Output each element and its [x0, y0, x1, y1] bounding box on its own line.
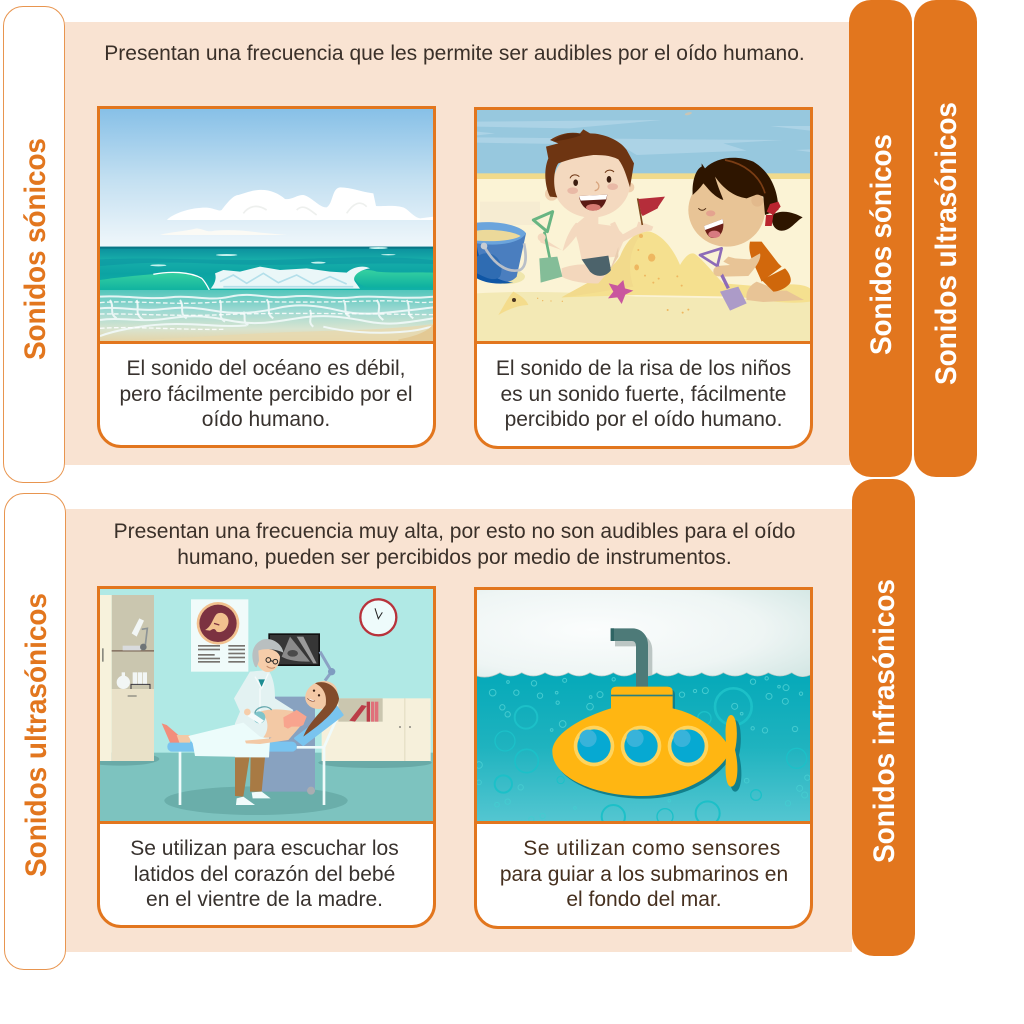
patient and doctor group: [162, 639, 348, 815]
boy head: [545, 187, 558, 201]
table: [180, 720, 336, 805]
right tab: Sonidos ultrasónicos: [914, 0, 977, 477]
right tab: Sonidos sónicos: [849, 0, 912, 477]
illustration: yellow submarine: [477, 590, 810, 821]
periscope: [611, 628, 648, 688]
sand mound: [562, 231, 810, 303]
panel: sonidos ultrasónicos background: [66, 509, 852, 952]
caption: children: percibido por el oído humano.: [505, 408, 782, 431]
flag: [638, 198, 642, 225]
heading: ultrasonic sounds description: Presentan una frecuencia muy alta, por esto no son audibles para el oído: [114, 520, 795, 543]
poster: [191, 599, 248, 672]
machine: [262, 697, 315, 792]
probe: [253, 711, 265, 723]
shell: [498, 292, 528, 315]
girl body: [746, 282, 804, 302]
bucket: [488, 269, 525, 284]
caption: ocean: oído humano.: [202, 408, 330, 431]
left tab: Sonidos sónicos: [3, 6, 65, 483]
left tab: Sonidos ultrasónicos: Sonidos ultrasónicos: [20, 593, 53, 877]
card: ocean: [97, 106, 436, 448]
caption: ocean: El sonido del océano es débil,: [126, 357, 406, 380]
portholes: [574, 726, 708, 766]
girl head: [688, 173, 765, 247]
heading: sonic sounds description: Presentan una frecuencia que les permite ser audibles por el oído humano.: [104, 42, 805, 65]
caption: ultrasound: [130, 837, 399, 911]
card: children laughing: [474, 107, 813, 449]
illustration: children playing on beach: [477, 110, 810, 341]
heading: ultrasonic sounds description: humano, pueden ser percibidos por medio de instrumentos.: [177, 546, 732, 569]
illustration: ocean wave and beach: [100, 109, 433, 341]
caption: children: El sonido de la risa de los niños: [496, 357, 791, 380]
caption: ocean: [120, 357, 412, 431]
starfish: [608, 280, 633, 304]
divider: [477, 821, 810, 824]
card: ultrasound: [97, 586, 436, 928]
caption: ultrasound: en el vientre de la madre.: [146, 888, 383, 911]
illustration: ultrasound in clinic: [100, 589, 433, 821]
torso and belly: [260, 709, 300, 738]
divider: [477, 341, 810, 344]
bubbles: [495, 688, 807, 828]
caption: children: [496, 357, 791, 431]
caption: submarine: el fondo del mar.: [566, 888, 722, 911]
monitor: [268, 633, 320, 666]
divider: [100, 341, 433, 344]
boy body: [562, 264, 610, 283]
panel: sonidos sónicos background: [65, 22, 850, 465]
caption: submarine: para guiar a los submarinos en: [500, 862, 788, 886]
doctor coat: [234, 670, 293, 757]
clock: [360, 599, 396, 635]
hull: [552, 687, 732, 796]
right tab: Sonidos sónicos: Sonidos sónicos: [865, 134, 898, 355]
patient head: [301, 676, 342, 714]
low cabinet: [322, 698, 431, 761]
boy shovel: [533, 212, 553, 232]
doctor head: [255, 649, 280, 672]
hull shadow: [555, 689, 734, 799]
left tab: Sonidos sónicos: Sonidos sónicos: [19, 138, 52, 360]
periscope shadow: [615, 634, 652, 692]
card: submarine: [474, 587, 813, 929]
divider: [100, 821, 433, 824]
caption: ocean: pero fácilmente percibido por el: [120, 382, 412, 406]
caption: ultrasound: latidos del corazón del bebé: [134, 862, 395, 886]
patient foot: [162, 723, 180, 743]
doctor legs: [235, 754, 250, 797]
heading: ultrasonic sounds description: [114, 520, 795, 569]
gown: [188, 723, 270, 757]
caption: submarine: [500, 837, 788, 911]
right tab: Sonidos infrasónicos: [852, 479, 915, 956]
girl shovel: [700, 248, 722, 266]
caption: ultrasound: Se utilizan para escuchar los: [130, 837, 399, 860]
caption: submarine: Se utilizan como sensores: [523, 837, 781, 860]
caption: children: es un sonido fuerte, fácilmente: [500, 382, 786, 406]
right tab: Sonidos ultrasónicos: Sonidos ultrasónicos: [930, 102, 963, 385]
right tab: Sonidos infrasónicos: Sonidos infrasónicos: [868, 579, 901, 863]
left tab: Sonidos ultrasónicos: [4, 493, 66, 970]
shelf cabinet: [112, 595, 154, 689]
water: [477, 673, 810, 822]
